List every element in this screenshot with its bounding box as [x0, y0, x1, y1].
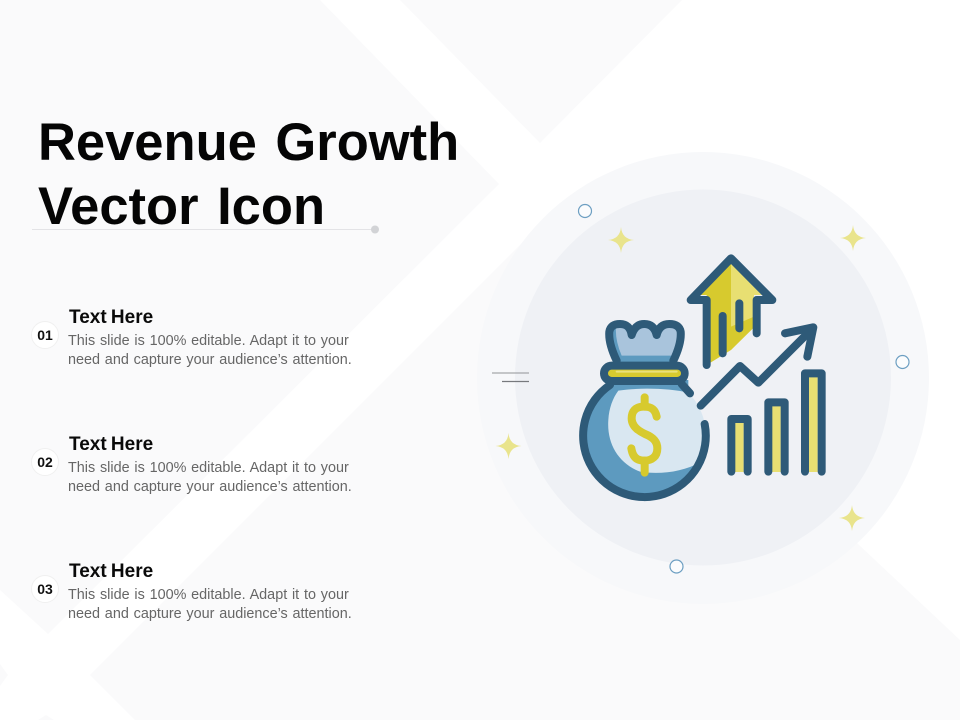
sparkle stars — [496, 225, 866, 531]
item 03 — [31, 561, 352, 622]
body 03: This slide is 100% editable. Adapt it to your — [68, 587, 349, 603]
body 03 — [68, 587, 352, 622]
body 01: need and capture your audience’s attention. — [68, 352, 352, 368]
body 02: This slide is 100% editable. Adapt it to your — [68, 460, 349, 476]
number 01: 01 — [37, 327, 53, 343]
up arrow — [691, 258, 772, 365]
number 01 — [31, 321, 59, 349]
body 02: need and capture your audience’s attention. — [68, 479, 352, 495]
growth line arrow — [701, 327, 813, 406]
number 03 — [31, 575, 59, 603]
heading 01: Text Here — [69, 307, 153, 328]
money bag — [583, 324, 706, 497]
heading 03: Text Here — [69, 561, 153, 582]
dollar sign — [631, 397, 657, 473]
body 01 — [68, 333, 352, 368]
number 02 — [31, 448, 59, 476]
number 02: 02 — [37, 454, 53, 470]
inner circle — [515, 190, 891, 566]
item 02 — [31, 434, 352, 495]
outer circle — [477, 152, 929, 604]
item 01 — [31, 307, 352, 368]
decorative rings — [578, 204, 909, 573]
body 03: need and capture your audience’s attention. — [68, 606, 352, 622]
icon: money bag, arrow and bars — [583, 258, 822, 497]
title — [38, 113, 459, 236]
number 03: 03 — [37, 581, 53, 597]
body 02 — [68, 460, 352, 495]
heading 02: Text Here — [69, 434, 153, 455]
motion lines — [492, 373, 529, 382]
title: Revenue Growth — [38, 113, 459, 172]
body 01: This slide is 100% editable. Adapt it to your — [68, 333, 349, 349]
title: Vector Icon — [38, 177, 325, 236]
bar chart — [731, 373, 822, 472]
